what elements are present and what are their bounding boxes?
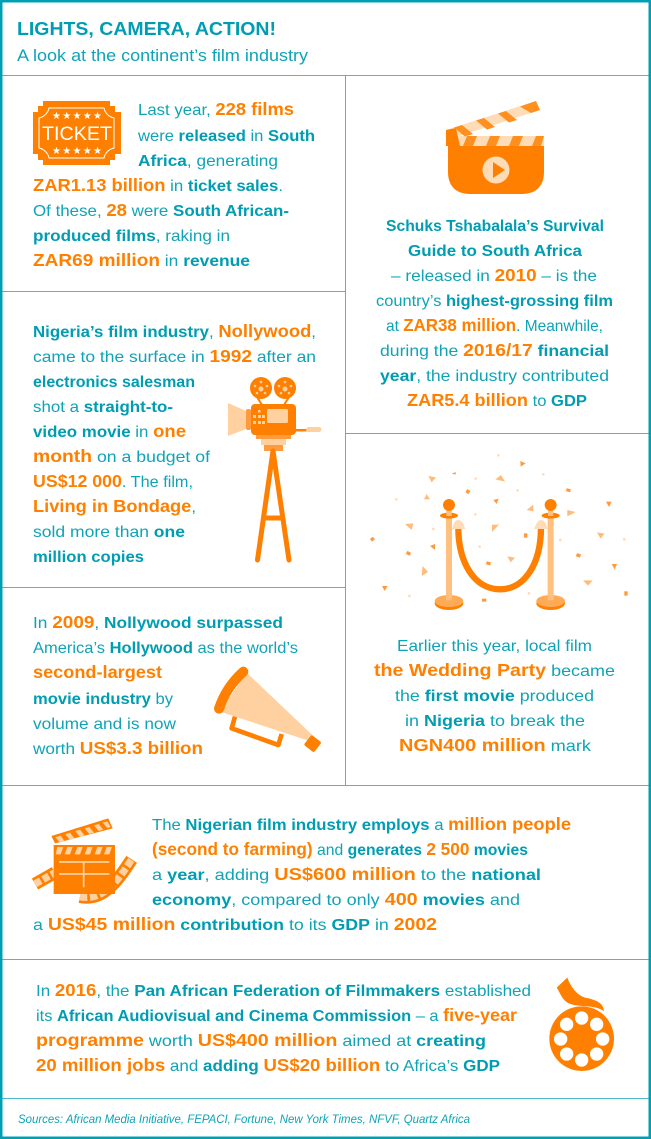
text: ticket sales: were released in South [137,128,315,145]
text: Nollywood versus Hollywood: volume and is now [33,716,176,733]
panel: highest-grossing film [376,101,613,410]
icon: ticket: ★★★★★ [52,146,102,157]
text: highest-grossing film: – released in 2010 – is the [391,265,597,285]
text: Nollywood origins: US$12 000. The film, [33,471,193,491]
text: Nollywood origins: million copies [33,549,144,566]
panel: ticket sales [33,99,315,270]
subtitle: A look at the continent’s film industry [17,46,309,65]
text: employment and economy: a year , adding US$600 million to the national [152,864,541,884]
panel: employment and economy [33,814,571,934]
text: Nollywood origins: electronics salesman [33,374,195,391]
text: The Wedding Party: the first movie produced [395,688,594,705]
header [17,19,309,65]
icon: film reel [549,978,614,1071]
text: highest-grossing film: during the 2016/17 financial [380,340,609,360]
text: Nollywood origins: Nigeria’s film industry , Nollywood , [33,321,316,341]
text: Nollywood versus Hollywood: In 2009, Nollywood surpassed [33,612,283,632]
panel: Nollywood origins [33,321,322,566]
text: Pan African Federation [36,980,531,1075]
text: highest-grossing film: year, the industry contributed [380,368,609,385]
text: Nollywood versus Hollywood: worth US$3.3 billion [32,738,203,758]
text: Nollywood versus Hollywood: second-largest [33,662,162,682]
text: Nollywood origins: Living in Bondage , [33,496,196,516]
text: highest-grossing film: at ZAR38 million. Meanwhile, [386,315,603,335]
text: highest-grossing film: Guide to South Africa [408,243,582,260]
icon: clapperboard and film strip [35,818,132,897]
title: LIGHTS, CAMERA, ACTION! [17,19,276,39]
text: employment and economy: a US$45 million contribution to its GDP in 2002 [33,914,437,934]
text: Nollywood versus Hollywood: movie industry by [33,691,173,708]
text: Nollywood versus Hollywood: America’s Hollywood as the world’s [33,640,298,657]
text: highest-grossing film [376,218,613,410]
icon: rope barrier with confetti [370,454,628,610]
text: The Wedding Party: in Nigeria to break the [405,713,585,730]
text: ticket sales: produced films , raking in [33,228,230,245]
panel: The Wedding Party [370,454,628,755]
text: Nollywood origins: shot a straight-to- [33,399,173,416]
icon: ticket [33,101,121,165]
text: ticket sales: Africa, generating [138,153,278,170]
sources: Sources: African Media Initiative, FEPACI, Fortune, New York Times, NFVF, Quartz Africa [18,1114,470,1126]
text: employment and economy: (second to farming) and generates 2 500 movies [152,839,528,859]
text: ticket sales: Of these, 28 were South African- [33,200,289,220]
text: Nollywood origins: month on a budget of [33,446,211,466]
text: ticket sales: ZAR69 million in revenue [33,250,250,270]
text: Nollywood versus Hollywood [32,612,298,758]
text: highest-grossing film: Schuks Tshabalala’s Survival [386,218,604,235]
text: highest-grossing film: country’s highest-grossing film [376,293,613,310]
icon: ticket: ★★★★★ [52,111,102,122]
text: ticket sales [33,99,315,270]
panel: Nollywood versus Hollywood [32,612,322,758]
text: Pan African Federation: 20 million jobs and adding US$20 billion to Africa’s GDP [36,1055,500,1075]
text: employment and economy: economy , compared to only 400 movies and [152,889,520,909]
text: The Wedding Party: Earlier this year, local film [397,638,592,655]
text: Nollywood origins: came to the surface in 1992 after an [33,346,316,366]
text: Pan African Federation: programme worth US$400 million aimed at creating [36,1030,486,1050]
icon: film camera on tripod [228,377,322,560]
text: ticket sales: Last year, 228 films [138,99,294,119]
panel: Pan African Federation [36,978,614,1075]
icon: clapperboard [446,101,544,194]
icon: ticket: TICKET [42,124,112,145]
text: ticket sales: ZAR1.13 billion in ticket sales . [33,175,283,195]
text: The Wedding Party: the Wedding Party became [374,660,615,680]
text: highest-grossing film: ZAR5.4 billion to GDP [407,390,587,410]
text: Nollywood origins: video movie in one [33,421,186,441]
text: Pan African Federation: its African Audiovisual and Cinema Commission – a five-year [36,1005,517,1025]
icon: megaphone [219,672,322,753]
text: The Wedding Party [374,638,615,755]
text: Nollywood origins: sold more than one [33,524,185,541]
text: The Wedding Party: NGN400 million mark [399,735,592,755]
text: Nollywood origins [33,321,316,566]
text: Pan African Federation: In 2016, the Pan African Federation of Filmmakers established [36,980,531,1000]
text: employment and economy [33,814,571,934]
text: employment and economy: The Nigerian film industry employs a million people [152,814,571,834]
